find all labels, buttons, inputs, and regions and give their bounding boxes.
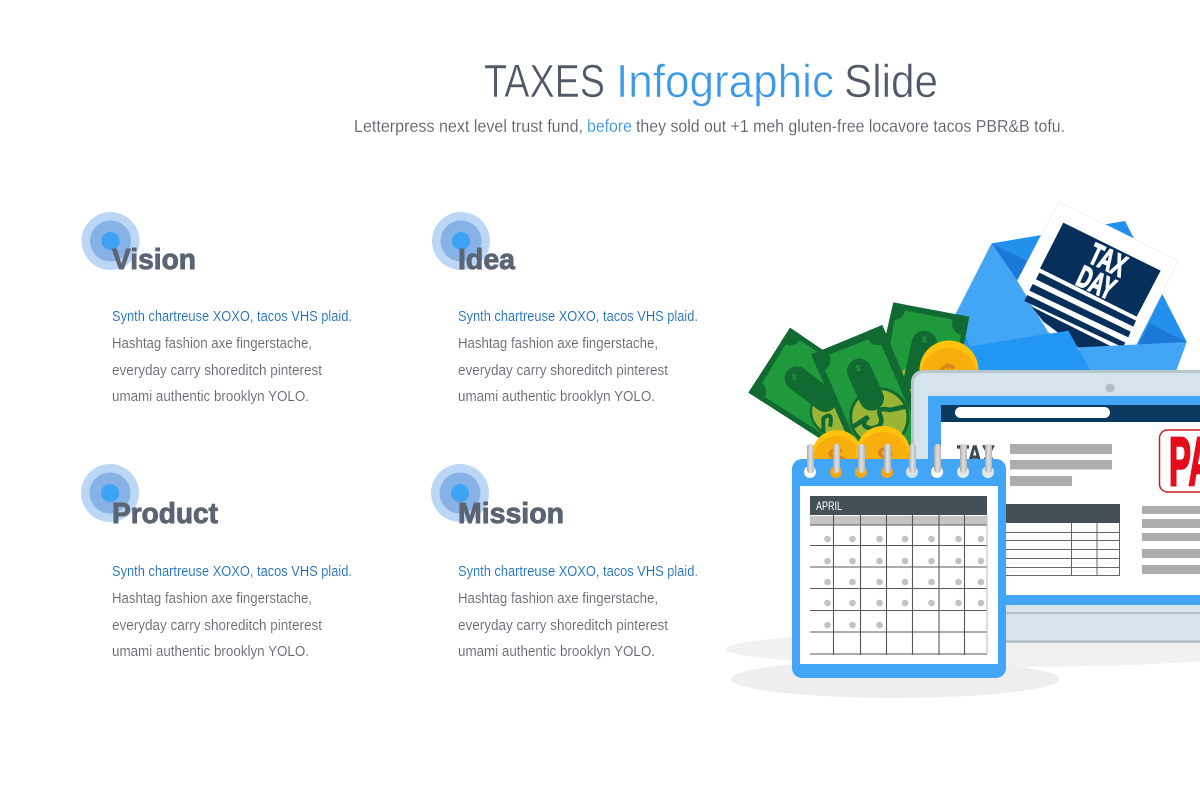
text block: idea [458, 309, 698, 405]
heading: vision: Vision [112, 244, 196, 276]
text block: vision: Synth chartreuse XOXO, tacos VHS plaid. [112, 309, 352, 325]
panel: mission [431, 464, 698, 660]
text block: product [112, 564, 352, 660]
icon: envelope with tax day letter: TAX [1084, 237, 1132, 284]
icon: april calendar [792, 444, 1006, 678]
subtitle: Letterpress next level trust fund, [354, 116, 583, 136]
icon: product target [81, 464, 139, 522]
text block: mission [458, 564, 698, 660]
icon: gold coins [812, 426, 910, 484]
icon: laptop [911, 370, 1200, 643]
subtitle [354, 116, 1065, 136]
icon: coin behind laptop [920, 340, 978, 404]
text block: idea: umami authentic brooklyn YOLO. [458, 389, 655, 405]
calendar month label: APRIL [816, 499, 842, 513]
heading: mission: Mission [458, 498, 564, 530]
icon: mission target [431, 464, 489, 522]
icon: envelope with tax day letter: DAY [1071, 260, 1121, 307]
panel: product [81, 464, 352, 660]
text block: mission: Hashtag fashion axe fingerstache, [458, 591, 658, 607]
calendar grid [810, 515, 987, 655]
calendar day dots [824, 536, 984, 628]
text block: mission: Synth chartreuse XOXO, tacos VHS plaid. [458, 564, 698, 580]
form text bars [1010, 444, 1200, 574]
calendar spiral rings [807, 444, 992, 473]
text block: product: Hashtag fashion axe fingerstache, [112, 591, 312, 607]
icon: dollar bills [742, 296, 976, 462]
text block: vision: everyday carry shoreditch pinterest [112, 363, 322, 379]
icon: vision target [82, 212, 140, 270]
subtitle: before [587, 116, 632, 136]
text block: idea: Synth chartreuse XOXO, tacos VHS plaid. [458, 309, 698, 325]
calendar binding holes [804, 466, 994, 478]
text block: product: everyday carry shoreditch pinterest [112, 618, 322, 634]
title [484, 55, 938, 107]
heading: idea: Idea [458, 244, 516, 276]
text block: vision [112, 309, 352, 405]
illustration: tax scene [726, 202, 1200, 698]
title: Infographic [616, 55, 834, 107]
title: TAXES [484, 55, 605, 107]
icon: gold coins: $ [868, 440, 898, 477]
icon: coin behind laptop: $ [936, 355, 963, 395]
subtitle: they sold out +1 meh gluten-free locavore tacos PBR&B tofu. [636, 116, 1065, 136]
form table [1000, 504, 1120, 576]
icon: dollar bills: $ [922, 335, 927, 345]
text block: vision: Hashtag fashion axe fingerstache, [112, 336, 312, 352]
icon: dollar bills: $ [856, 363, 861, 373]
icon: dollar bills: $ [792, 372, 797, 382]
icon: envelope with tax day letter [956, 202, 1187, 377]
title: Slide [844, 55, 938, 107]
ground shadows [726, 631, 1200, 698]
calendar right edge [986, 516, 988, 654]
panel: vision [82, 212, 352, 405]
text block: product: Synth chartreuse XOXO, tacos VHS plaid. [112, 564, 352, 580]
text block: idea: everyday carry shoreditch pinterest [458, 363, 668, 379]
text block: mission: umami authentic brooklyn YOLO. [458, 644, 655, 660]
text block: mission: everyday carry shoreditch pinterest [458, 618, 668, 634]
text block: product: umami authentic brooklyn YOLO. [112, 644, 309, 660]
panel: idea [432, 212, 698, 405]
tax form heading: TAX [957, 441, 995, 469]
heading: product: Product [112, 498, 218, 530]
text block: vision: umami authentic brooklyn YOLO. [112, 389, 309, 405]
icon: gold coins: $ [825, 440, 850, 477]
text block: idea: Hashtag fashion axe fingerstache, [458, 336, 658, 352]
icon: idea target [432, 212, 490, 270]
